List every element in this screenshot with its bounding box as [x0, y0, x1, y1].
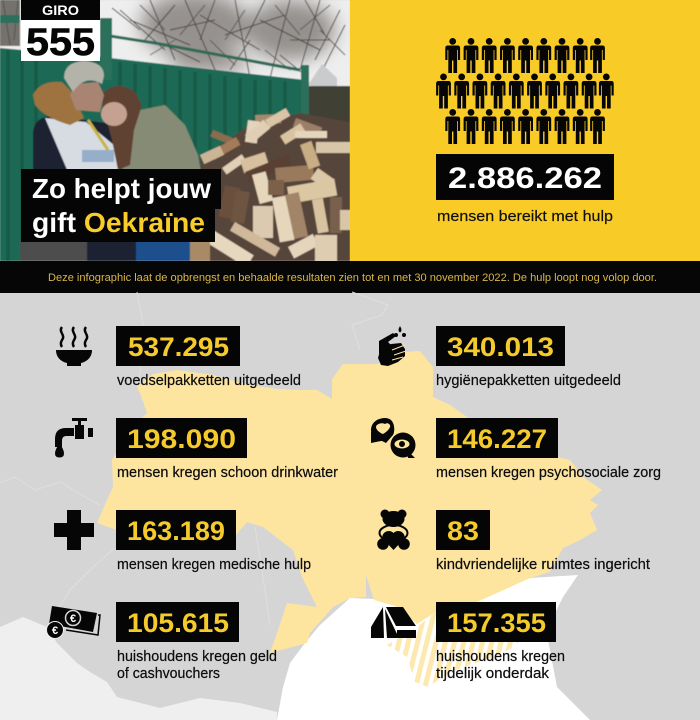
stat: psychosocial care: 146.227	[447, 424, 547, 454]
icon: banknotes and euro coin: €	[52, 625, 58, 637]
icon: tent	[371, 607, 416, 638]
title: Zo helpt jouw gift Oekraïne: Zo helpt jouw	[32, 173, 212, 204]
stat: drinking water	[55, 418, 338, 481]
stat: temporary shelter: 157.355	[447, 608, 546, 638]
stat: cash: 105.615	[127, 608, 229, 638]
map of Ukraine and surrounding area	[0, 292, 700, 720]
badge: Giro 555	[21, 0, 100, 64]
banner: date notice: Deze infographic laat de opbrengst en behaalde resultaten zien tot en met 30 november 2022. De hulp loopt nog volop door.	[48, 272, 657, 284]
stat: food parcels: voedselpakketten uitgedeeld	[117, 373, 301, 389]
stat: temporary shelter	[371, 602, 565, 682]
text: mensen bereikt met hulp: mensen bereikt met hulp	[437, 208, 613, 225]
stat: temporary shelter: huishoudens kregen	[436, 649, 565, 665]
stat: temporary shelter: tijdelijk onderdak	[436, 666, 550, 682]
stat: medical help	[54, 510, 311, 573]
house	[308, 64, 338, 87]
banner: date notice	[0, 261, 700, 293]
total number	[436, 154, 614, 200]
stat: cash: huishoudens kregen geld	[117, 649, 277, 665]
brown fence	[308, 85, 350, 123]
stat: food parcels: 537.295	[128, 332, 229, 362]
stat: child friendly spaces: 83	[447, 516, 479, 546]
lower body	[20, 240, 88, 261]
Ukraine territory	[97, 351, 602, 653]
stat: psychosocial care	[371, 418, 661, 481]
badge: Giro 555: GIRO	[42, 3, 79, 18]
total number: 2.886.262	[448, 162, 602, 195]
icon: speech bubbles	[371, 418, 416, 458]
stat: medical help: mensen kregen medische hulp	[117, 557, 311, 573]
stat: child friendly spaces: kindvriendelijke ruimtes ingericht	[436, 557, 650, 573]
stat: drinking water: 198.090	[127, 424, 236, 454]
icon: washing hands	[378, 326, 406, 366]
stat: medical help: 163.189	[127, 516, 225, 546]
green fence	[0, 48, 305, 261]
stat: food parcels	[56, 326, 301, 389]
stat: cash: of cashvouchers	[117, 666, 220, 682]
icon: rows of people	[436, 38, 614, 144]
stat: hygiene kits	[378, 326, 621, 389]
posts and rail	[100, 18, 112, 80]
stat: hygiene kits: hygiënepakketten uitgedeeld	[436, 373, 621, 389]
badge: Giro 555: 555	[26, 21, 95, 64]
icon: water tap	[55, 418, 93, 458]
Crimea, hatched	[387, 612, 520, 687]
stat: hygiene kits: 340.013	[447, 332, 554, 362]
people	[32, 116, 114, 169]
tree canopy	[140, 0, 335, 72]
stat: drinking water: mensen kregen schoon drinkwater	[117, 465, 338, 481]
title: Zo helpt jouw gift Oekraïne	[21, 169, 221, 242]
stat: child friendly spaces	[377, 510, 650, 573]
icon: teddy bear	[377, 510, 410, 550]
firewood pile	[200, 113, 350, 261]
icon: banknotes and euro coin: €	[70, 613, 76, 625]
stat: cash	[46, 602, 277, 682]
stat: psychosocial care: mensen kregen psychosociale zorg	[436, 465, 661, 481]
title: Zo helpt jouw gift Oekraïne: gift Oekraïne	[32, 207, 205, 238]
icon: banknotes and euro coin	[46, 606, 100, 638]
panel: people reached	[350, 0, 700, 261]
icon: bowl of soup	[56, 327, 92, 366]
panel: photo of volunteer, woman and firewood	[0, 0, 350, 267]
icon: cross	[54, 510, 94, 550]
